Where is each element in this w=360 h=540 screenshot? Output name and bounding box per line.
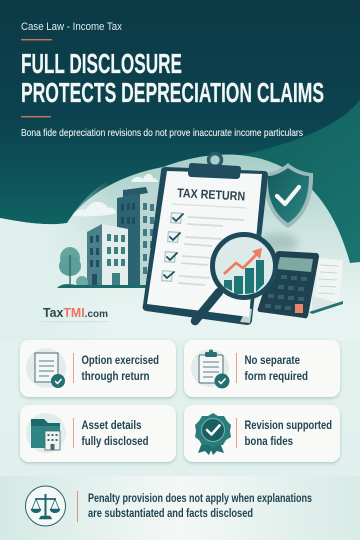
illustration: books bbox=[309, 258, 343, 314]
header bbox=[21, 21, 324, 139]
illustration: magnifying glass with chart bbox=[195, 234, 276, 321]
conclusion text bbox=[88, 493, 312, 520]
card text bbox=[244, 355, 308, 383]
card: revision supported bbox=[184, 405, 340, 462]
clip bbox=[188, 154, 241, 179]
logo: TaxTMI.com: TaxTMI.com bbox=[43, 305, 108, 320]
card: no separate form bbox=[184, 340, 340, 397]
card text bbox=[244, 420, 332, 448]
card text: bona fides bbox=[244, 436, 293, 448]
card text: form required bbox=[244, 371, 308, 383]
card text: through return bbox=[82, 371, 150, 383]
bar chart bbox=[224, 260, 264, 294]
front building bbox=[87, 224, 128, 287]
illustration: city buildings and tree bbox=[57, 174, 158, 288]
category label: Case Law - Income Tax bbox=[21, 21, 122, 33]
icon: scales of justice bbox=[26, 486, 66, 526]
clipboard board bbox=[143, 167, 268, 325]
ground bbox=[57, 284, 150, 288]
checklist bbox=[162, 213, 244, 285]
card text: Asset details bbox=[82, 420, 142, 432]
clouds bbox=[131, 174, 158, 182]
icon: clipboard with check bbox=[191, 349, 230, 388]
title: FULL DISCLOSURE bbox=[21, 48, 182, 79]
card: option exercised bbox=[20, 340, 176, 397]
card text: No separate bbox=[244, 355, 300, 367]
icon: document with check bbox=[26, 348, 66, 388]
illustration: tax return clipboard bbox=[143, 154, 268, 325]
card text: fully disclosed bbox=[82, 436, 148, 448]
card: asset details bbox=[20, 405, 176, 462]
title bbox=[21, 48, 324, 108]
trend arrow bbox=[224, 253, 258, 274]
icon: check bbox=[277, 187, 299, 204]
panel: conclusion bbox=[0, 476, 360, 540]
icon: award rosette bbox=[195, 413, 231, 455]
card text bbox=[82, 355, 159, 383]
illustration: shield bbox=[264, 163, 313, 228]
card text: Option exercised bbox=[82, 355, 159, 367]
card text bbox=[82, 420, 148, 448]
form title: TAX RETURN bbox=[177, 186, 245, 204]
illustration: calculator bbox=[258, 233, 319, 318]
tree bbox=[59, 247, 88, 288]
icon: folder with building bbox=[26, 413, 66, 453]
conclusion text: are substantiated and facts disclosed bbox=[88, 508, 253, 520]
card text: Revision supported bbox=[244, 420, 332, 432]
tall building bbox=[117, 187, 158, 287]
